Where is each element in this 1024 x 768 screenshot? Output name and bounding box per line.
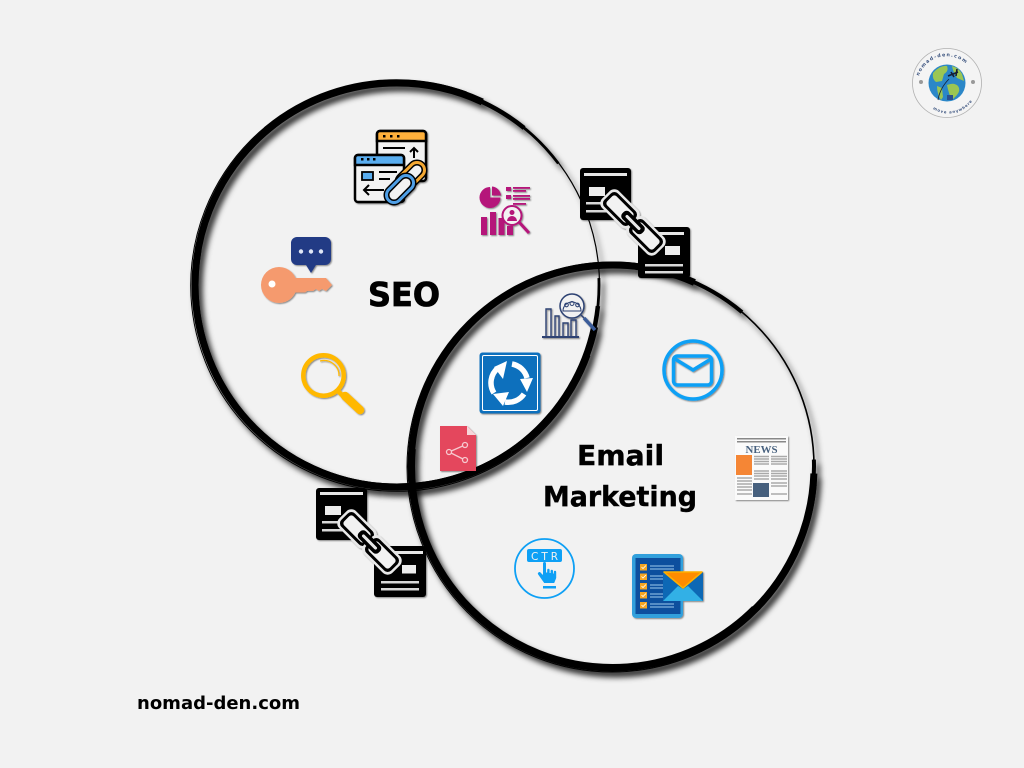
icon: roundabout sign	[480, 352, 540, 414]
heading: Email Marketing: Email	[577, 439, 664, 472]
circle: SEO	[191, 80, 602, 491]
heading: SEO: SEO	[368, 275, 440, 314]
heading: Email Marketing: Marketing	[543, 480, 697, 513]
icon: analytics report magenta	[480, 186, 530, 235]
logo: globe badge	[912, 48, 982, 118]
footer: website address: nomad-den.com	[137, 693, 300, 714]
logo: globe badge: nomad-den.com	[916, 53, 967, 76]
icon: link building bottom left	[316, 488, 426, 597]
icon: email checklist	[632, 554, 703, 618]
icon: analytics audience navy	[542, 294, 595, 337]
heading: Email Marketing	[543, 439, 697, 513]
icon: browser windows with chain	[355, 131, 428, 206]
icon: link building top right	[580, 168, 690, 278]
logo: globe badge: move anywhere	[933, 100, 972, 114]
icon: newspaper	[735, 436, 788, 500]
icon: key with chat bubble	[261, 237, 332, 303]
circle: Email Marketing	[407, 262, 817, 672]
icon: CTR click: CTR	[531, 551, 558, 563]
icon: red document share	[440, 426, 476, 471]
icon: mail circle	[664, 341, 722, 399]
icon: newspaper: NEWS	[746, 445, 778, 456]
icon: magnifying glass	[303, 355, 360, 410]
icon: CTR click	[515, 539, 574, 598]
